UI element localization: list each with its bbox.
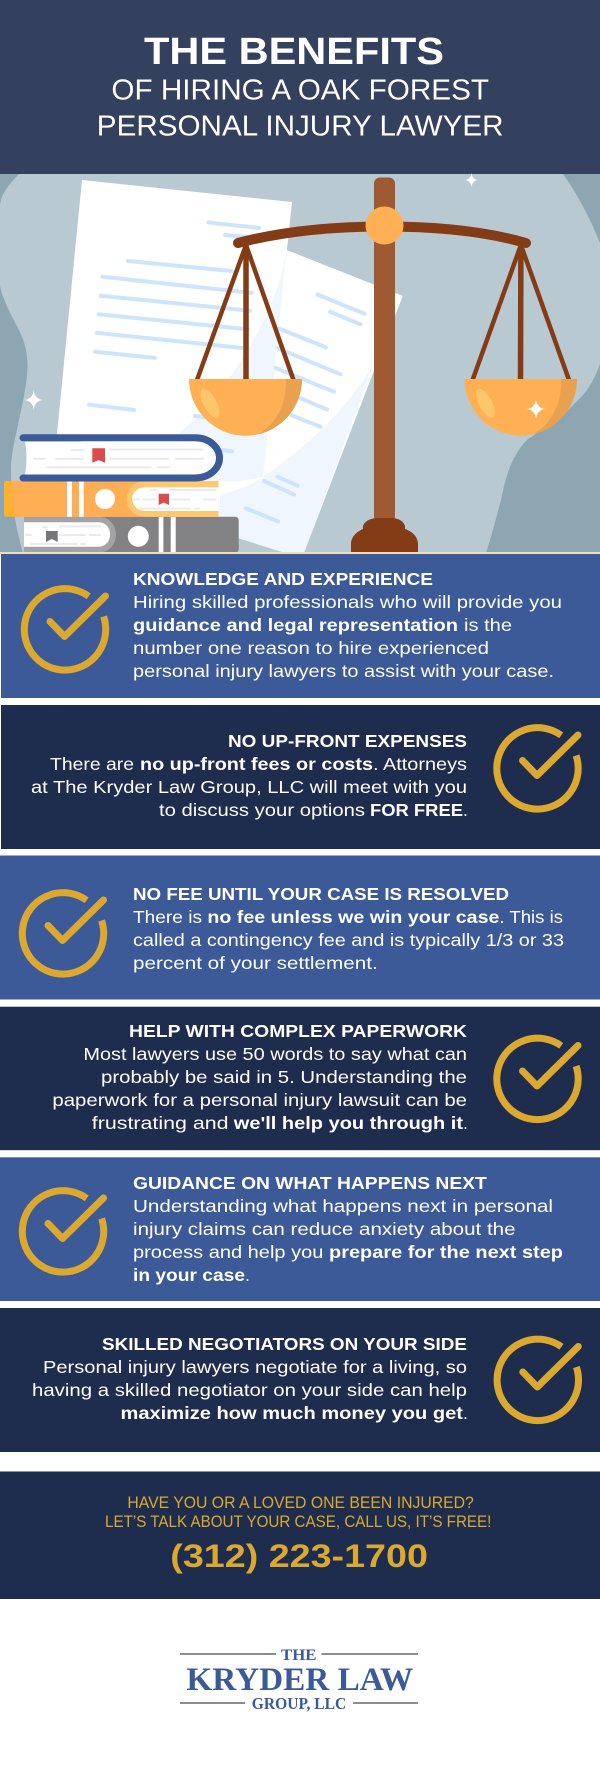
- body text: called a contingency fee and is typically 1/3 or 33: [133, 930, 564, 950]
- icon: check circle: [24, 589, 106, 670]
- body text: probably be said in 5. Understanding the: [101, 1067, 467, 1087]
- body text: number one reason to hire experienced: [133, 638, 489, 658]
- body text: [31, 754, 468, 820]
- body text: There is: [133, 907, 202, 927]
- heading: KNOWLEDGE AND EXPERIENCE: [133, 569, 433, 589]
- body text: . Attorneys: [373, 754, 467, 774]
- title: OF HIRING A OAK FOREST: [111, 75, 489, 107]
- blue book: [23, 438, 220, 478]
- heading: SKILLED NEGOTIATORS ON YOUR SIDE: [102, 1334, 467, 1354]
- body text: Understanding what happens next in personal: [133, 1196, 553, 1216]
- right pan: [465, 379, 577, 436]
- header banner: [0, 0, 600, 174]
- illustration: scales of justice, documents and books: [0, 173, 600, 554]
- body text: is the: [464, 615, 512, 635]
- body text: Most lawyers use 50 words to say what can: [83, 1044, 467, 1064]
- logo: The Kryder Law Group, LLC: KRYDER LAW: [186, 1662, 413, 1698]
- panel: guidance on what happens next: [0, 1157, 600, 1301]
- icon: check circle: [497, 1038, 578, 1120]
- body text: .: [245, 1265, 250, 1285]
- icon: check circle: [22, 1191, 104, 1272]
- body text: guidance and legal representation: [133, 615, 458, 635]
- call to action band: [0, 1472, 600, 1599]
- icon: check circle: [497, 1339, 578, 1421]
- grey book: [24, 517, 239, 553]
- heading: NO UP-FRONT EXPENSES: [228, 731, 467, 751]
- body text: no fee unless we win your case: [207, 907, 500, 927]
- call to action text: [105, 1494, 491, 1531]
- logo: The Kryder Law Group, LLC: [180, 1647, 418, 1713]
- body text: to discuss your options: [159, 800, 365, 820]
- panel: no fee until resolved: [0, 856, 600, 1000]
- body text: .: [463, 1113, 468, 1133]
- body text: [133, 907, 564, 973]
- logo: The Kryder Law Group, LLC: THE: [281, 1647, 316, 1664]
- body text: injury claims can reduce anxiety about the: [133, 1219, 516, 1239]
- body text: personal injury lawyers to assist with your case.: [133, 661, 554, 681]
- heading: GUIDANCE ON WHAT HAPPENS NEXT: [133, 1173, 487, 1193]
- heading: NO FEE UNTIL YOUR CASE IS RESOLVED: [133, 884, 509, 904]
- orange book: [4, 481, 218, 517]
- heading: HELP WITH COMPLEX PAPERWORK: [129, 1021, 467, 1041]
- body text: [32, 1357, 468, 1423]
- scale of justice: [189, 178, 577, 553]
- body text: There are: [50, 754, 134, 774]
- left pan: [189, 379, 302, 436]
- logo: The Kryder Law Group, LLC: GROUP, LLC: [252, 1694, 346, 1713]
- body text: prepare for the next step: [329, 1242, 563, 1262]
- body text: we'll help you through it: [233, 1113, 463, 1133]
- body text: having a skilled negotiator on your side can help: [32, 1380, 467, 1400]
- body text: .: [463, 800, 468, 820]
- body text: percent of your settlement.: [133, 953, 378, 973]
- body text: paperwork for a personal injury lawsuit can be: [52, 1090, 467, 1110]
- body text: [52, 1044, 468, 1133]
- title: THE BENEFITS: [144, 31, 444, 73]
- documents: [57, 180, 403, 552]
- body text: Hiring skilled professionals who will provide you: [133, 592, 562, 612]
- body text: no up-front fees or costs: [140, 754, 373, 774]
- body text: .: [463, 1403, 468, 1423]
- call to action text: LET’S TALK ABOUT YOUR CASE, CALL US, IT’S FREE!: [105, 1513, 491, 1531]
- panel: no up-front expenses: [1, 705, 600, 849]
- body text: at The Kryder Law Group, LLC will meet with you: [31, 777, 467, 797]
- body text: [133, 1196, 563, 1285]
- panel: skilled negotiators: [0, 1308, 600, 1452]
- panel: knowledge and experience: [1, 554, 600, 698]
- title: [97, 31, 504, 143]
- icon: check circle: [22, 893, 104, 974]
- body text: FOR FREE: [370, 800, 463, 820]
- phone number: (312) 223-1700: [170, 1538, 428, 1574]
- body text: frustrating and: [92, 1113, 228, 1133]
- books: [4, 438, 239, 553]
- icon: check circle: [497, 728, 578, 809]
- body text: . This is: [499, 907, 563, 927]
- sparkles: [25, 173, 545, 419]
- body text: maximize how much money you get: [120, 1403, 463, 1423]
- body text: Personal injury lawyers negotiate for a living, so: [43, 1357, 467, 1377]
- call to action text: HAVE YOU OR A LOVED ONE BEEN INJURED?: [127, 1494, 474, 1512]
- title: PERSONAL INJURY LAWYER: [97, 111, 504, 143]
- body text: process and help you: [133, 1242, 323, 1262]
- body text: in your case: [133, 1265, 245, 1285]
- body text: [133, 592, 562, 681]
- panel: help with complex paperwork: [0, 1007, 600, 1150]
